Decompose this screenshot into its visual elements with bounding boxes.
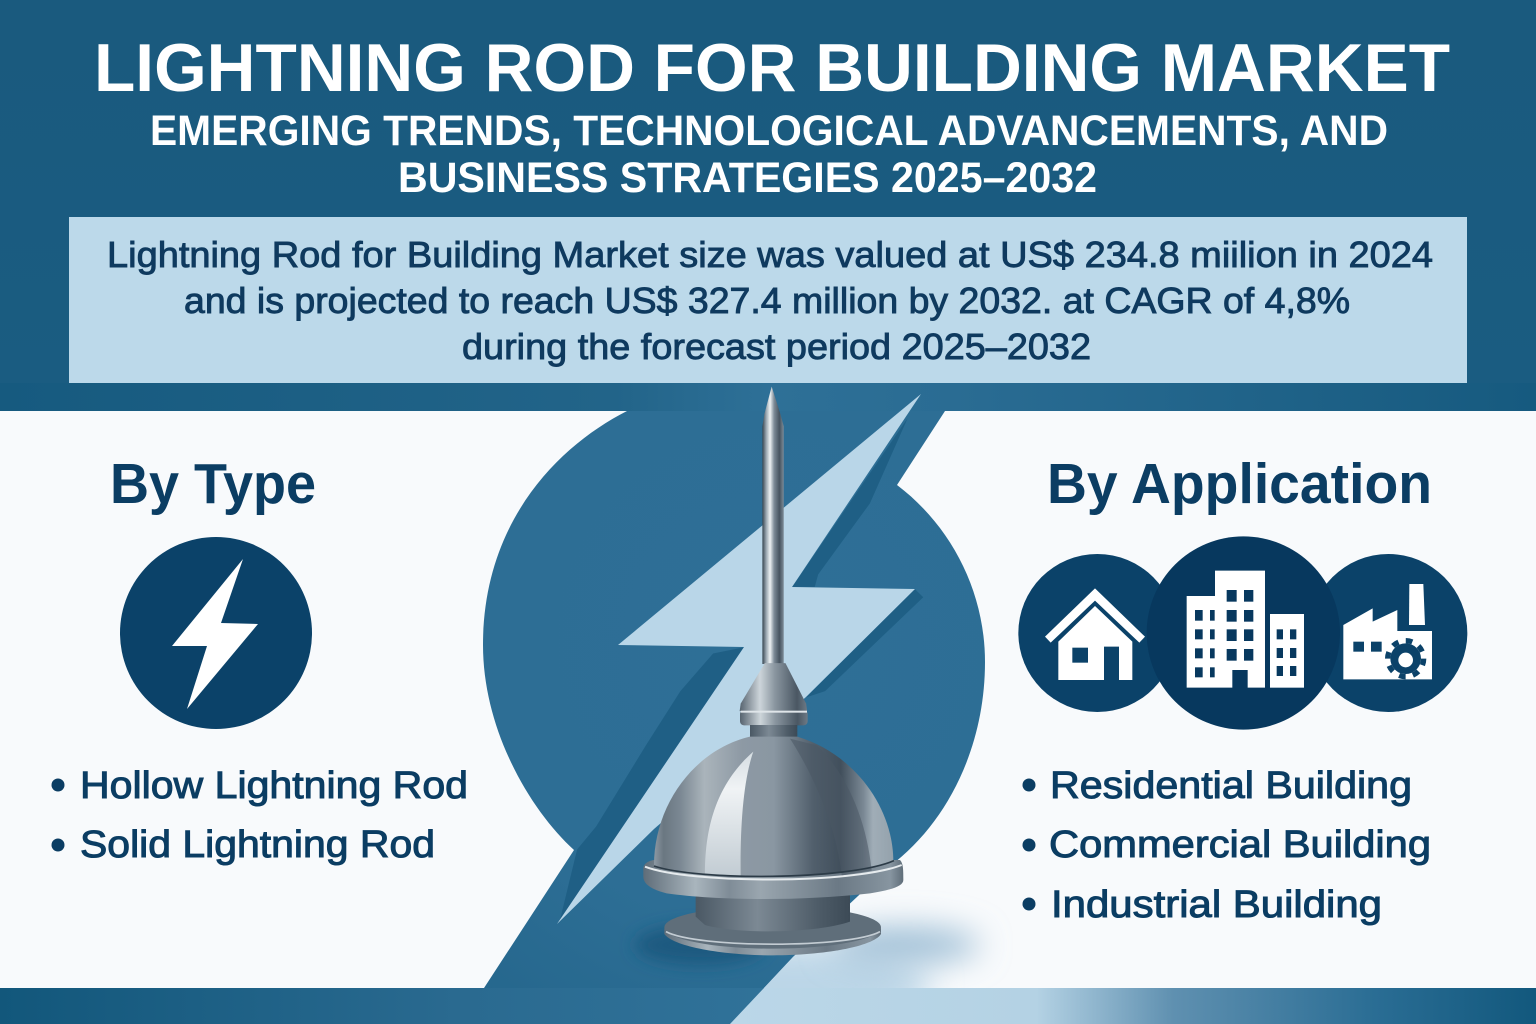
panel: by application [1018, 452, 1467, 926]
base disk side [664, 928, 881, 955]
flange [643, 860, 903, 899]
icons: building types [1018, 536, 1467, 730]
summary box [69, 217, 1467, 383]
list item: residential: Residential Building [1050, 765, 1412, 807]
rod body [643, 710, 903, 955]
list item: hollow: Hollow Lightning Rod [80, 765, 468, 807]
summary line 2: and is projected to reach US$ 327.4 million by 2032. at CAGR of 4,8% [184, 280, 1350, 321]
bolt shadows [560, 418, 923, 920]
subtitle line 1: EMERGING TRENDS, TECHNOLOGICAL ADVANCEMENTS, AND [150, 107, 1388, 155]
collar line [741, 711, 807, 713]
list item: commercial: Commercial Building [1049, 824, 1431, 866]
icon: office buildings [1147, 536, 1340, 730]
summary line 3: during the forecast period 2025–2032 [462, 326, 1091, 367]
list item: industrial: Industrial Building [1051, 884, 1382, 926]
panel: by application background [764, 411, 1536, 988]
dome highlight [705, 752, 753, 876]
soft shadow on white panel [764, 907, 990, 988]
flange light ring [645, 865, 902, 879]
lightning bolt graphic [557, 394, 923, 924]
header band [0, 0, 1536, 383]
dome [654, 737, 893, 876]
subtitle line 2: BUSINESS STRATEGIES 2025–2032 [398, 154, 1097, 202]
neck [750, 725, 797, 740]
dome right dark band [790, 739, 872, 875]
bottom band [0, 988, 1536, 1024]
base disk ring [666, 932, 880, 944]
shadow under base [635, 925, 765, 965]
spike [762, 387, 784, 664]
heading: by type: By Type [110, 452, 316, 516]
bolt shape [557, 394, 921, 924]
collar [740, 710, 808, 725]
heading: by application: By Application [1047, 452, 1432, 516]
list item: solid: Solid Lightning Rod [80, 824, 435, 866]
panel: by type background [0, 411, 627, 988]
icon: factory [1309, 554, 1467, 712]
header text [94, 30, 1450, 202]
base disk top [664, 906, 881, 949]
lightning rod [635, 387, 903, 965]
bottom band light gradient section [730, 988, 1536, 1024]
cone [740, 663, 807, 711]
dome groove [654, 861, 894, 876]
summary line 1: Lightning Rod for Building Market size was valued at US$ 234.8 miilion in 2024 [107, 234, 1433, 275]
rod top [740, 387, 807, 711]
icon: house [1018, 554, 1176, 712]
lower neck [696, 895, 850, 931]
panel: market summary [69, 217, 1467, 383]
panel: by type [52, 452, 468, 866]
strip below summary box [0, 383, 1536, 411]
icon: lightning bolt badge [120, 537, 312, 729]
title: LIGHTNING ROD FOR BUILDING MARKET [94, 30, 1450, 106]
